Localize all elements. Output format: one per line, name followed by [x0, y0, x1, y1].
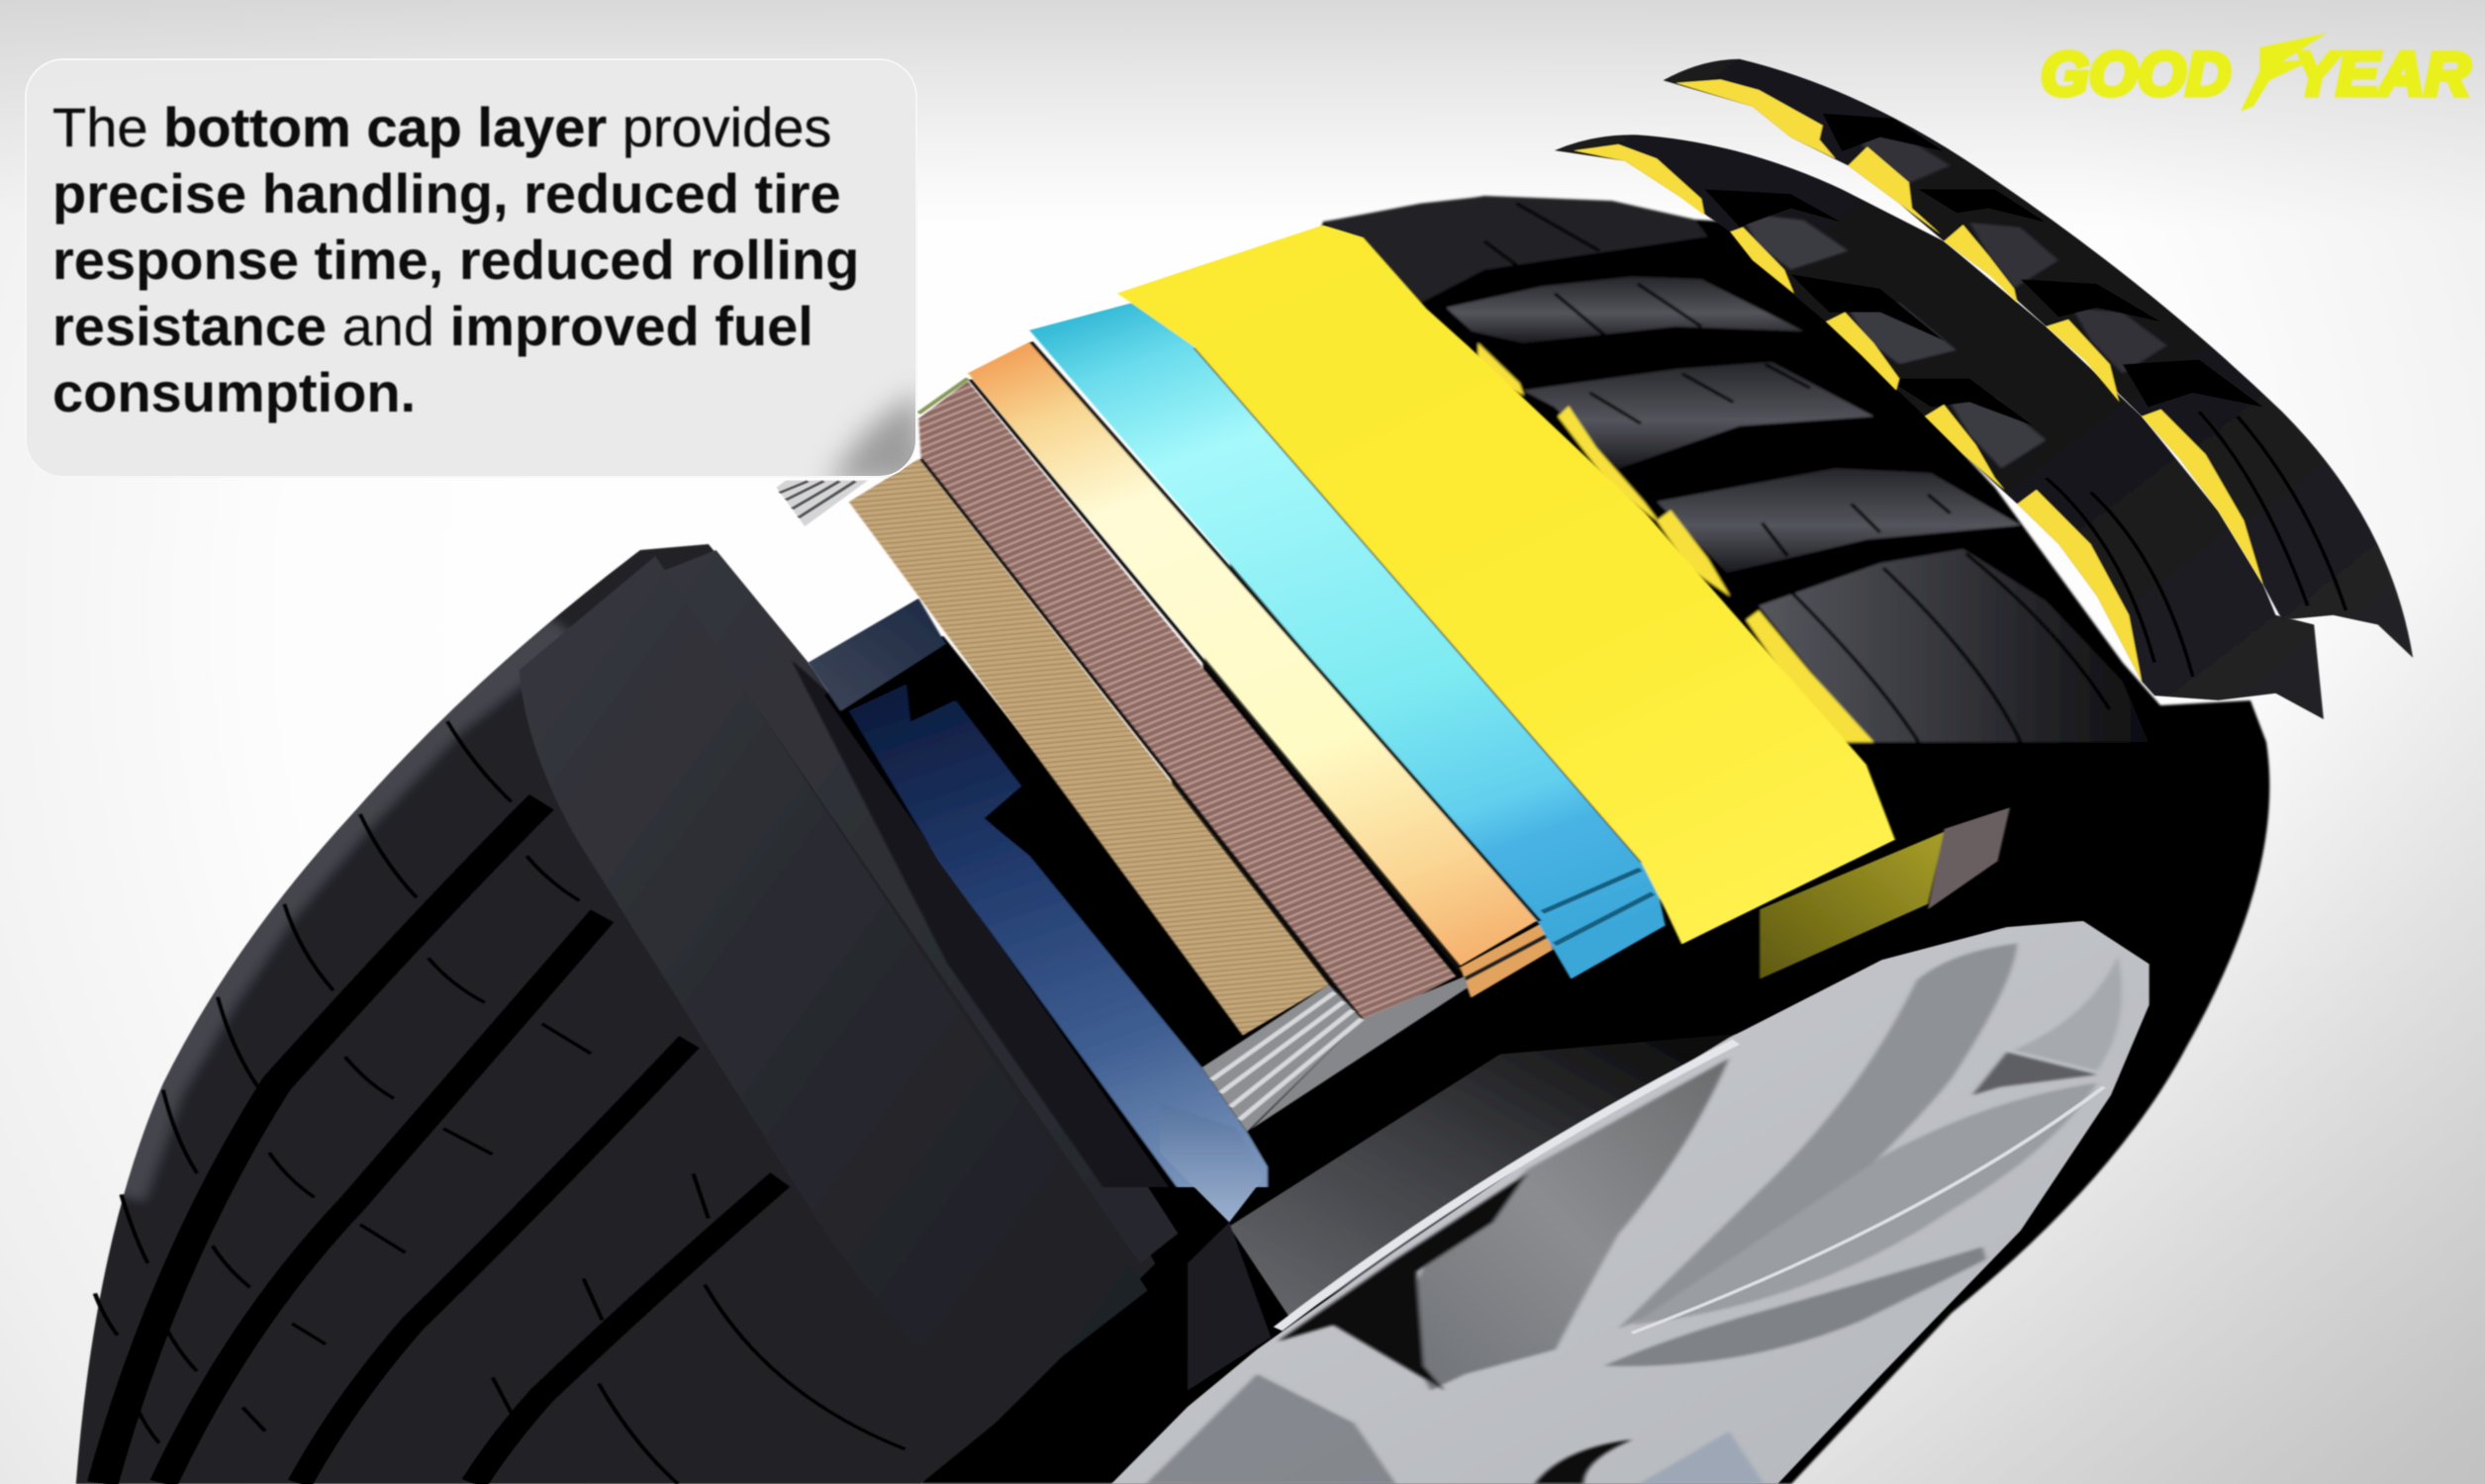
rim shoulder band: [1229, 1034, 1736, 1321]
wheel recesses: [1146, 944, 2122, 1484]
callout text: [52, 96, 859, 423]
callout text: The bottom cap layer provides: [52, 96, 831, 158]
layer: cyan under-tread: [1029, 301, 1666, 979]
peeled tread slice: second layer: [1555, 135, 2324, 719]
tread highlight: [126, 628, 564, 1197]
layer dividers: [921, 342, 1643, 1025]
layer: yellow tread base: [1117, 225, 1895, 944]
blue rim panel: [849, 685, 1268, 1187]
shoulder panel: [663, 550, 1178, 1263]
Goodyear logo: YEAR: [2294, 41, 2470, 109]
wheel rim: [1111, 921, 2150, 1484]
wheel well interior: [792, 599, 1276, 1187]
grooves: [103, 802, 781, 1484]
centre panel: [519, 556, 1148, 1414]
callout text: consumption.: [52, 361, 416, 423]
callout box: [26, 59, 930, 485]
tire body with tread section: [920, 196, 2269, 1484]
layer: grey sidewall compound: [1928, 807, 2010, 909]
steel cord strip, upper: [776, 481, 868, 526]
layer: mauve ply: [918, 381, 1456, 1023]
layer: orange cap end: [1460, 923, 1553, 998]
left tire tread: [76, 544, 1178, 1484]
Goodyear logo: [2041, 33, 2470, 111]
yellow cap segments, slice 1: [1675, 79, 2263, 585]
layer: cream bottom cap: [968, 342, 1538, 966]
peeled tread slice: top layer: [1664, 59, 2413, 658]
callout text: response time, reduced rolling: [52, 229, 859, 291]
tread blocks: [1323, 196, 2149, 742]
layer: tan casing: [849, 459, 1329, 1036]
callout text: resistance and improved fuel: [52, 295, 813, 357]
icon: winged foot: [2241, 33, 2327, 111]
sipes: [95, 721, 906, 1484]
yellow teeth beside tread base: [1479, 343, 1873, 742]
cap ply and belt layers: [849, 225, 2010, 1132]
steel cord strip, lower: [1201, 976, 1469, 1132]
layer: dull yellow shoulder: [1760, 832, 1945, 979]
navy rim band: [808, 599, 946, 711]
yellow cap segments, slice 2: [1574, 144, 2142, 682]
callout text: precise handling, reduced tire: [52, 162, 841, 225]
Goodyear logo: GOOD: [2041, 41, 2231, 109]
